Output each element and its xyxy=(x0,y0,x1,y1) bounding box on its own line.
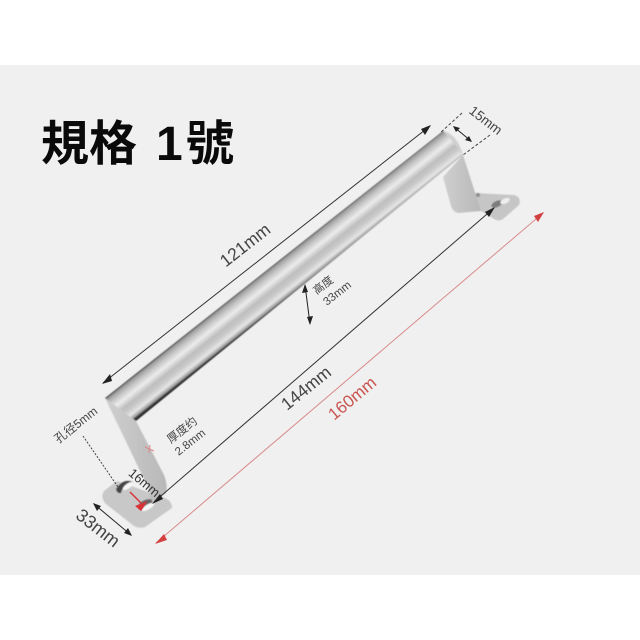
title: 1 xyxy=(156,118,183,171)
dimension: 16mm hole spacing: 16mm xyxy=(126,465,163,500)
background panel xyxy=(0,65,640,575)
dimension: height 33mm: 高度 xyxy=(310,273,336,297)
left mounting plate xyxy=(102,481,172,528)
dimension: height 33mm xyxy=(302,273,354,325)
left bracket arm xyxy=(105,398,167,503)
dimension: 121mm xyxy=(102,125,431,384)
dimension: 144mm: 144mm xyxy=(277,362,335,414)
title: 規格 xyxy=(41,118,137,171)
dimension: 121mm: 121mm xyxy=(216,219,274,271)
handle illustration xyxy=(102,131,520,528)
dimension: 15mm xyxy=(440,103,505,155)
dimension: hole diameter 5mm: 孔径5mm xyxy=(52,404,100,446)
dimension: thickness 2.8mm: 2.8mm xyxy=(173,427,208,458)
dimension: height 33mm: 33mm xyxy=(321,279,354,308)
tube end cap xyxy=(443,131,463,155)
dimension: 144mm xyxy=(152,207,495,504)
title xyxy=(41,118,234,171)
dimension: 33mm plate width: 33mm xyxy=(72,505,124,551)
right plate holes xyxy=(476,193,511,209)
tube xyxy=(105,131,463,421)
right mounting plate xyxy=(475,193,520,220)
dimension: hole diameter 5mm xyxy=(52,404,118,487)
title: 號 xyxy=(186,118,234,171)
left plate holes xyxy=(116,481,156,513)
dimension: 160mm: 160mm xyxy=(325,373,380,424)
right bracket arm xyxy=(443,155,481,213)
dimension: thickness 2.8mm: 厚度约 xyxy=(164,414,200,446)
dimension: thickness 2.8mm xyxy=(145,414,208,458)
dimension: 15mm: 15mm xyxy=(466,103,505,138)
